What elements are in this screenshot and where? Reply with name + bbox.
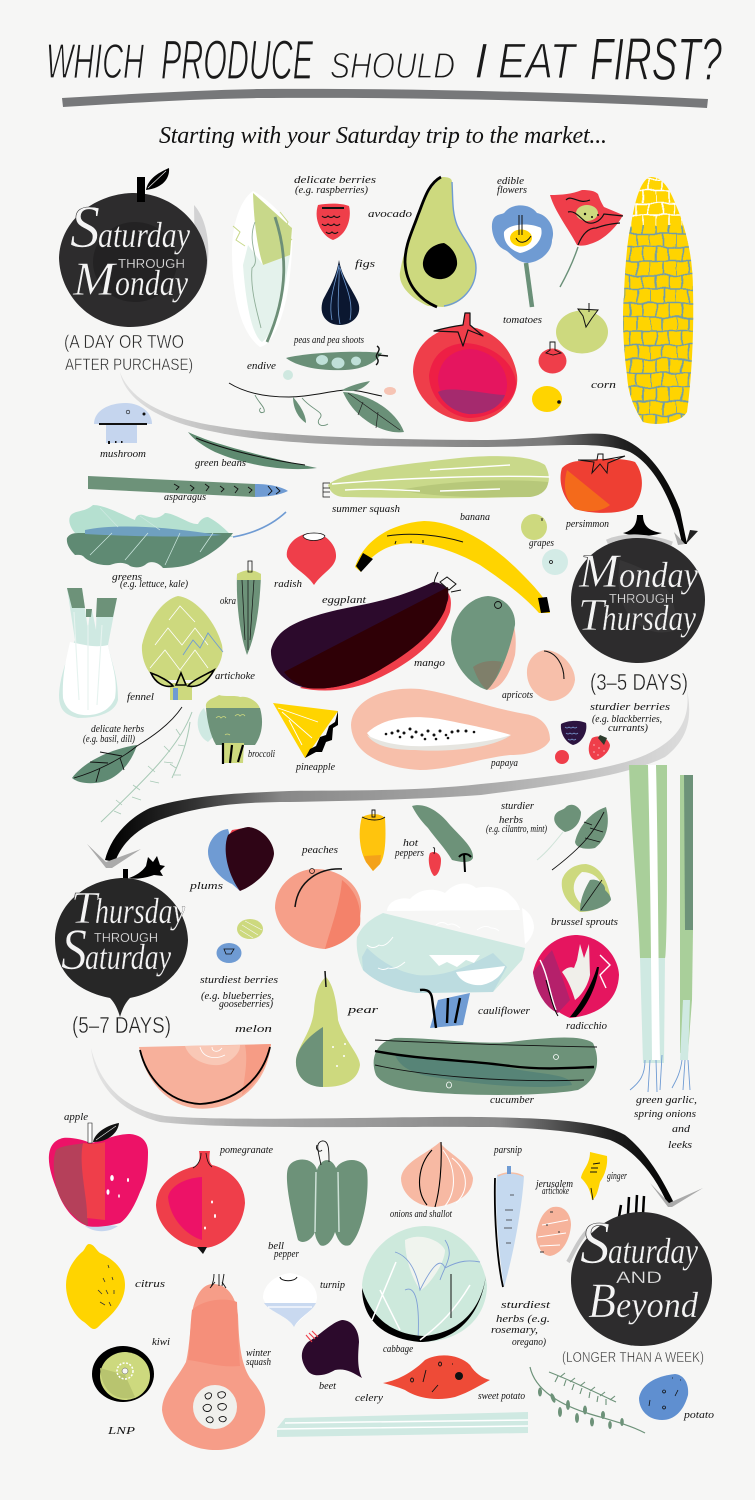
label: eggplant: eggplant [322, 595, 367, 606]
icon: big tomato [413, 313, 517, 422]
signature: LNP: LNP [107, 1426, 136, 1437]
time note: longer than a week: (LONGER THAN A WEEK) [562, 1349, 704, 1366]
label: corn: corn [591, 380, 616, 391]
icon: blueberry [216, 943, 242, 963]
label: sturdiest berries: gooseberries) [219, 999, 273, 1010]
period badge: Thursday through Saturday (radish) [55, 856, 188, 1017]
label: artichoke: artichoke [215, 671, 255, 682]
label: greens: (e.g. lettuce, kale) [120, 579, 188, 590]
period badge: Monday through Thursday: THROUGH [609, 591, 674, 606]
label: bell pepper: pepper [273, 1249, 300, 1260]
label: brussels sprouts: brussel sprouts [551, 917, 618, 928]
icon: broccoli [198, 695, 262, 764]
label: green beans: green beans [195, 458, 246, 469]
period badge: Saturday through Monday (apple): onday [115, 263, 188, 303]
icon: small pale pea [283, 370, 293, 380]
icon: radicchio [533, 935, 619, 1018]
label: pineapple: pineapple [295, 762, 335, 773]
label: fennel: fennel [127, 692, 154, 703]
label: winter squash: squash [246, 1357, 271, 1368]
title: EAT [498, 33, 578, 89]
icon: rosemary sprig [549, 1372, 616, 1405]
label: green garlic, spring onions and leeks: and [672, 1124, 691, 1135]
label: pear: pear [346, 1005, 379, 1016]
title: SHOULD [330, 45, 455, 86]
icon: cilantro [537, 805, 581, 860]
icon: pea pod [286, 346, 388, 370]
label: jerusalem artichoke: jerusalem [534, 1179, 573, 1190]
icon: yellow tomato [532, 386, 562, 412]
icon: pineapple [273, 703, 338, 758]
period badge: Saturday through Monday (apple): S [70, 194, 100, 260]
label: asparagus: asparagus [164, 492, 206, 503]
icon: kiwi [92, 1346, 154, 1402]
label: sturdiest herbs: sturdiest [501, 1300, 551, 1311]
label: sturdier herbs: sturdier [501, 801, 535, 812]
label: hot peppers: peppers [394, 848, 424, 859]
label: greens [112, 572, 188, 590]
label: turnip: turnip [320, 1280, 345, 1291]
icon: raspberry [317, 204, 350, 240]
label: melon: melon [235, 1024, 272, 1035]
icon: cauliflower [357, 884, 534, 1028]
label: hot peppers: hot [403, 838, 419, 849]
icon: eggplant [271, 572, 461, 690]
label: plums: plums [189, 881, 223, 892]
label: delicate berries [294, 175, 376, 196]
label: jerusalem artichoke [534, 1179, 573, 1197]
label: grapes: grapes [529, 538, 554, 549]
icon: dill [101, 712, 192, 822]
icon: radish [287, 533, 336, 585]
period badge: Saturday and beyond (root): aturday [608, 1231, 698, 1271]
label: figs: figs [355, 259, 375, 270]
icon: mint leaf [552, 807, 608, 870]
icon: blackberry [561, 721, 586, 745]
label: citrus: citrus [135, 1279, 165, 1290]
label: sturdiest herbs [491, 1300, 551, 1348]
label: bell pepper [268, 1241, 300, 1260]
period badge: Thursday through Saturday (radish): hursday [95, 891, 185, 931]
label: sweet potato: sweet potato [478, 1391, 525, 1402]
label: bell pepper: bell [268, 1241, 284, 1252]
label: jerusalem artichoke: artichoke [542, 1186, 569, 1197]
label: delicate herbs [83, 724, 144, 745]
label: delicate herbs: delicate herbs [91, 724, 144, 735]
period badge: Saturday and beyond (root): B [588, 1272, 616, 1328]
icon: artichoke [142, 596, 223, 700]
label: sturdier berries: currants) [608, 723, 649, 734]
time note: a day or two: (A DAY OR TWO [64, 332, 184, 352]
icon: gooseberry [237, 919, 263, 939]
label: mango: mango [414, 658, 445, 669]
period badge: Saturday and beyond (root): S [580, 1210, 610, 1276]
period badge: Saturday through Monday (apple) [59, 168, 208, 327]
icon: pale grape [542, 549, 568, 575]
label: green garlic, spring onions and leeks: leeks [668, 1140, 692, 1151]
label: peas and pea shoots: peas and pea shoots [293, 335, 364, 346]
icon: ginger [581, 1152, 607, 1200]
icon: strawberry [589, 735, 610, 760]
period badge: Saturday and beyond (root): eyond [616, 1285, 699, 1325]
icon: papaya [351, 689, 550, 770]
icon: onion [401, 1142, 473, 1207]
title: WHICH [46, 35, 144, 89]
icon: celery [277, 1412, 528, 1437]
label: edible flowers: edible [497, 176, 524, 187]
label: papaya: papaya [490, 758, 518, 769]
time note: 5-7 days: (5–7 DAYS) [72, 1012, 171, 1038]
icon: apricot [527, 650, 575, 701]
title: I [474, 33, 488, 89]
icon: large green onion [629, 765, 667, 1092]
title [46, 26, 722, 93]
icon: small green onion [672, 775, 693, 1090]
label: sturdiest berries: (e.g. blueberries, [201, 991, 274, 1002]
icon: asparagus [88, 476, 288, 497]
icon: cucumber [374, 1038, 597, 1095]
icon: banana [355, 521, 550, 613]
label: persimmon: persimmon [565, 519, 609, 530]
period badge: Monday through Thursday [571, 515, 705, 663]
icon: mushroom [94, 403, 152, 444]
icon: bell pepper [287, 1141, 368, 1246]
icon: pear [296, 971, 360, 1087]
icon: yellow pepper [360, 810, 385, 871]
label: sturdier herbs [486, 801, 547, 835]
subtitle: Starting with your Saturday trip to the market... [159, 123, 607, 149]
label: okra: okra [220, 596, 236, 607]
icon: green hot pepper [412, 805, 473, 872]
label: green garlic, spring onions and leeks: spring onions [634, 1109, 696, 1120]
label: sturdier herbs: herbs [499, 815, 523, 826]
arrow: third to fourth period [91, 1048, 703, 1207]
icon: pomegranate [156, 1151, 245, 1254]
label: potato: potato [683, 1410, 714, 1421]
icon: greens leaf [67, 505, 286, 568]
icon: mango [451, 596, 516, 690]
period badge: Thursday through Saturday (radish): S [61, 917, 87, 982]
label: sturdiest herbs: rosemary, [491, 1325, 538, 1336]
icon: currant [555, 750, 569, 764]
icon: green tomato [556, 303, 608, 354]
period badge: Monday through Thursday: onday [619, 555, 698, 595]
icon: oregano sprig [530, 1367, 645, 1433]
icon: red poppy [550, 190, 623, 287]
icon: persimmon [561, 454, 642, 513]
arrow: first to second period [120, 372, 698, 545]
icon: avocado [400, 177, 476, 307]
icon: apple [49, 1123, 148, 1231]
label: broccoli: broccoli [248, 749, 275, 760]
label: winter squash [246, 1348, 272, 1368]
title underline brush stroke [62, 89, 708, 108]
icon: green grape [521, 514, 547, 540]
label: green garlic, spring onions and leeks [634, 1095, 697, 1151]
label: onion and shallot: onions and shallot [390, 1209, 453, 1220]
icon: basil leaf [72, 707, 182, 783]
label: parsnip: parsnip [493, 1145, 522, 1156]
label: ginger: ginger [607, 1171, 628, 1182]
label: winter squash: winter [246, 1348, 272, 1359]
icon: small red tomato [538, 342, 566, 374]
label: delicate berries: (e.g. raspberries) [295, 185, 368, 196]
label: mushroom: mushroom [100, 449, 146, 460]
label: radicchio: radicchio [566, 1021, 607, 1032]
icon: okra [237, 561, 261, 655]
label: sturdiest herbs: oregano) [512, 1337, 546, 1348]
icon: sweet potato [383, 1355, 490, 1399]
label: greens: greens [112, 572, 142, 583]
icon: peach [275, 868, 361, 949]
label: pomegranate: pomegranate [219, 1145, 273, 1156]
icon: corn [623, 177, 694, 424]
label: cabbage: cabbage [383, 1344, 413, 1355]
label: banana: banana [460, 512, 490, 523]
label: sturdier herbs: (e.g. cilantro, mint) [486, 824, 547, 835]
icon: blue flower [492, 205, 553, 307]
label: endive: endive [247, 361, 276, 372]
icon: potato [639, 1374, 688, 1420]
label: apricots: apricots [502, 690, 533, 701]
icon: melon [139, 1044, 271, 1109]
icon: pea shoot branch [229, 381, 404, 432]
label: sturdier berries: (e.g. blackberries, [592, 714, 662, 725]
label: sturdiest berries: sturdiest berries [200, 975, 278, 986]
label: kiwi: kiwi [152, 1337, 170, 1348]
arrow: second to third period [87, 690, 689, 868]
period badge: Monday through Thursday: M [578, 545, 622, 598]
icon: cabbage [362, 1226, 487, 1342]
icon: endive [232, 191, 292, 347]
label: tomatoes: tomatoes [503, 315, 542, 326]
period badge: Saturday through Monday (apple): THROUGH [118, 256, 185, 271]
label: sturdiest herbs: herbs (e.g. [496, 1314, 550, 1325]
icon: jerusalem artichoke [536, 1207, 571, 1256]
icon: fennel [59, 588, 118, 718]
label: green garlic, spring onions and leeks: green garlic, [636, 1095, 697, 1106]
label: edible flowers [497, 176, 527, 196]
icon: winter squash [162, 1274, 265, 1450]
label: edible flowers: flowers [497, 185, 527, 196]
period badge: Thursday through Saturday (radish): aturday [85, 937, 171, 977]
time note: 3-5 days: (3–5 DAYS) [590, 669, 688, 695]
period badge: Thursday through Saturday (radish): T [71, 882, 100, 933]
icon: summer squash [323, 456, 550, 498]
label: radish: radish [274, 579, 302, 590]
label: peaches: peaches [301, 845, 338, 856]
icon: brussels sprout [562, 864, 611, 912]
title: PRODUCE [161, 28, 313, 91]
label: delicate herbs: (e.g. basil, dill) [83, 734, 135, 745]
label: delicate berries: delicate berries [294, 175, 376, 186]
icon: red chilli [429, 848, 441, 876]
label: hot peppers [394, 838, 424, 859]
label: beet: beet [319, 1381, 337, 1392]
period badge: Saturday through Monday (apple): M [72, 253, 118, 306]
label: summer squash: summer squash [332, 504, 400, 515]
label: cauliflower: cauliflower [478, 1006, 531, 1017]
label: sturdier berries: sturdier berries [590, 702, 670, 713]
period badge: Saturday and beyond (root): AND [616, 1268, 662, 1287]
icon: fig [322, 260, 359, 325]
period badge: Thursday through Saturday (radish): THROUGH [94, 930, 158, 945]
period badge: Monday through Thursday: T [578, 589, 607, 640]
icon: plum [208, 827, 274, 891]
label: sturdier berries [590, 702, 670, 734]
label: avocado: avocado [368, 209, 412, 220]
icon: green beans [188, 432, 317, 469]
icon: turnip [263, 1273, 317, 1327]
icon: lemon [66, 1244, 125, 1329]
label: apple: apple [64, 1112, 88, 1123]
period badge: Saturday and beyond (root) [568, 1195, 712, 1346]
label: celery: celery [355, 1393, 383, 1404]
icon: beet [302, 1320, 362, 1378]
period badge: Saturday through Monday (apple): aturday [98, 215, 190, 255]
time note: a day or two: AFTER PURCHASE) [65, 355, 193, 374]
label: sturdiest berries [200, 975, 278, 1010]
period badge: Monday through Thursday: hursday [602, 598, 696, 638]
time note: a day or two [64, 332, 193, 374]
icon: parsnip [495, 1166, 524, 1287]
label: cucumber: cucumber [490, 1095, 535, 1106]
